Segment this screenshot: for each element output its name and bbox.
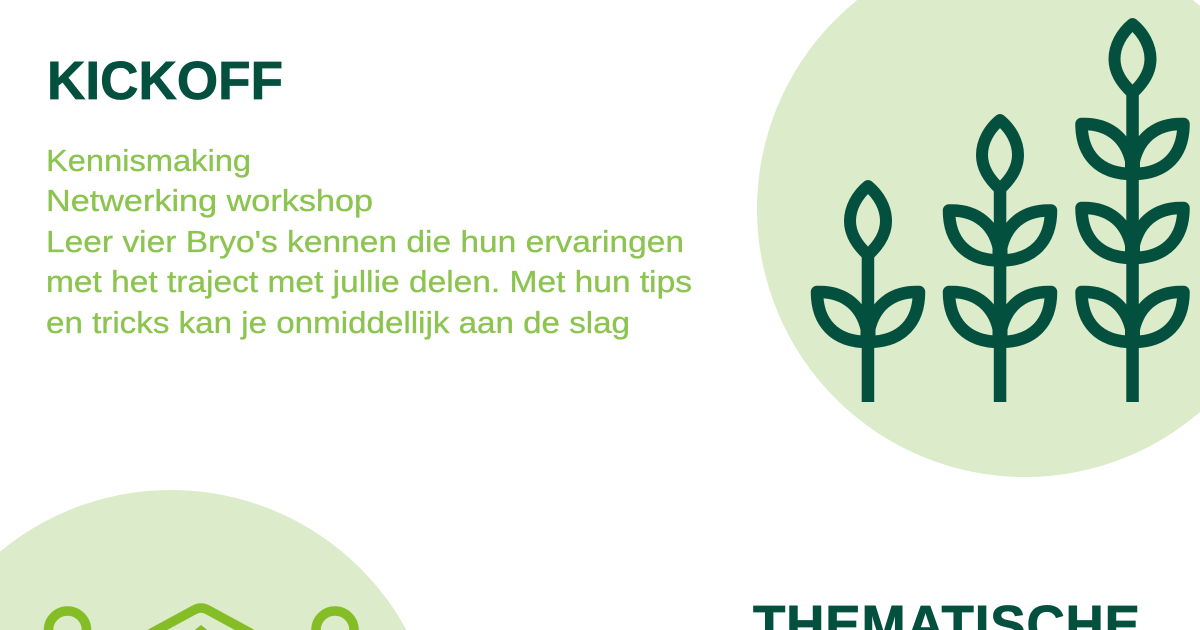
text block: kickoff description: Netwerking workshop xyxy=(46,183,373,218)
icon: tall plant xyxy=(1082,24,1184,402)
text block: kickoff description: Leer vier Bryo's kennen die hun ervaringen xyxy=(46,224,684,259)
heading: kickoff: KICKOFF xyxy=(47,52,283,111)
text block: kickoff description: Kennismaking xyxy=(46,143,251,178)
panel: top right circle xyxy=(757,0,1200,477)
icon: right node xyxy=(316,611,354,630)
icon: medium plant xyxy=(949,120,1051,402)
icon: small plant xyxy=(817,186,919,402)
icon: inner hexagon xyxy=(182,625,220,630)
icon: left node xyxy=(48,611,86,630)
panel: bottom left circle xyxy=(0,490,439,630)
text block: kickoff description xyxy=(46,143,692,340)
text block: kickoff description: met het traject met jullie delen. Met hun tips xyxy=(46,264,692,299)
icon: hexagon outline xyxy=(148,608,254,630)
icon: three growing plants xyxy=(817,24,1184,402)
icon: connected hexagon network xyxy=(48,608,354,630)
text block: kickoff description: en tricks kan je onmiddellijk aan de slag xyxy=(46,305,630,340)
